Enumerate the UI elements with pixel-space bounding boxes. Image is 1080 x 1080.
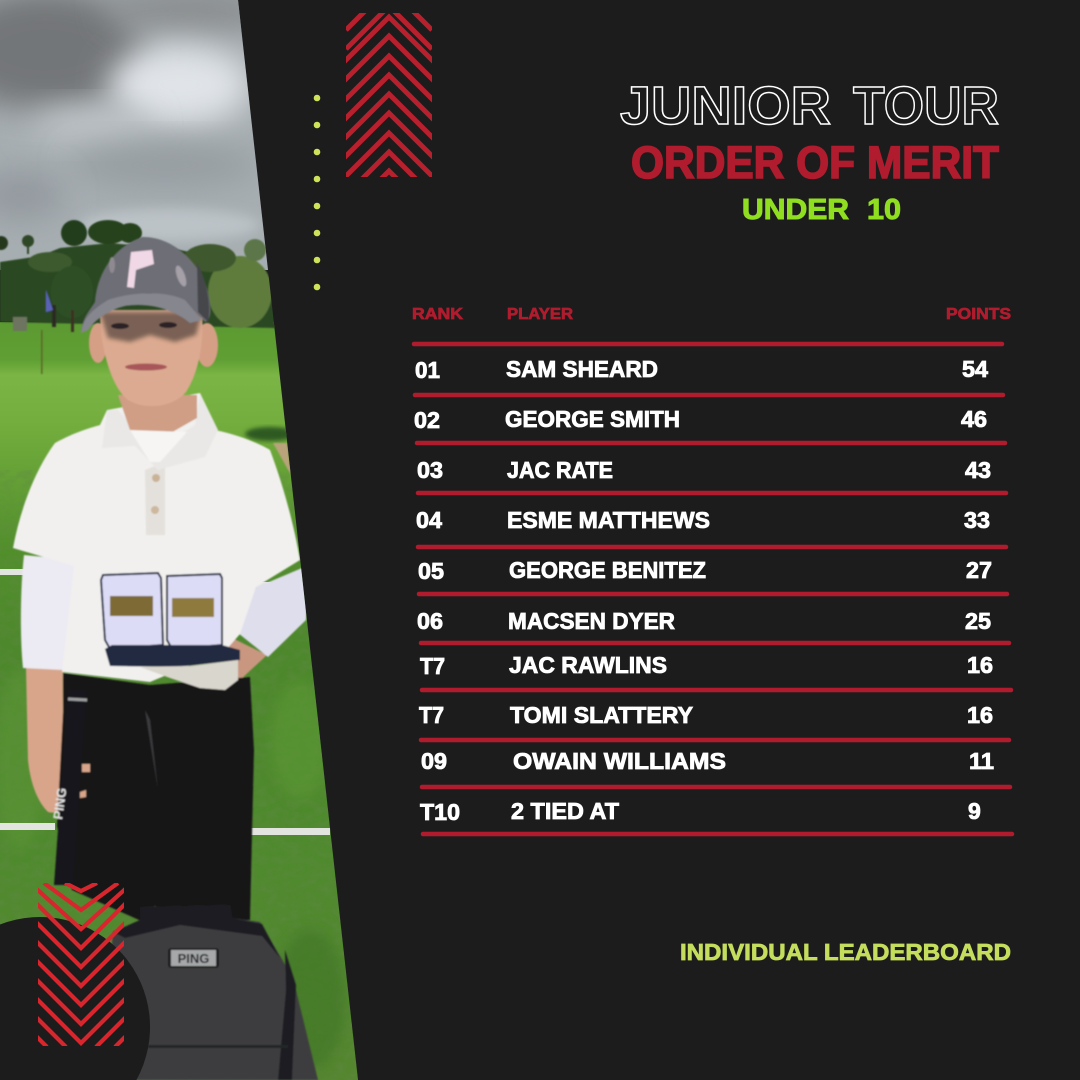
medal boxes	[101, 573, 163, 649]
leaderboard row 04: 04	[416, 507, 442, 533]
putter grip	[53, 830, 72, 886]
leaderboard row 09: 11	[969, 748, 994, 774]
leaderboard row 06	[417, 608, 991, 634]
leaderboard row 01: 01	[415, 357, 440, 383]
leaderboard row T10: 2 TIED AT	[511, 798, 619, 824]
leaderboard row 03: JAC RATE	[507, 457, 613, 483]
subheading: Under 10: UNDER	[742, 194, 849, 226]
bottom chevron pattern	[38, 883, 124, 1046]
golfer: PING	[50, 787, 69, 820]
golfer	[13, 237, 318, 1080]
heading: Order of Merit: ORDER OF MERIT	[631, 137, 999, 188]
leaderboard row 03: 03	[417, 457, 443, 483]
leaderboard row 04	[416, 507, 990, 533]
leaderboard row T7 second: 16	[967, 702, 993, 728]
leaderboard row 05: GEORGE BENITEZ	[509, 557, 706, 583]
dark circle bottom-left	[0, 917, 150, 1080]
leaderboard row 01: SAM SHEARD	[506, 356, 658, 382]
leaderboard row T7 first: 16	[967, 652, 993, 678]
photo: young golfer with medals	[0, 0, 370, 1080]
leaderboard row 02: GEORGE SMITH	[505, 406, 680, 432]
ears	[89, 323, 107, 363]
neck and undershirt	[118, 394, 198, 432]
leaderboard row 03	[417, 457, 991, 483]
leaderboard row T7 second: T7	[419, 702, 444, 728]
fingers on grip	[80, 764, 90, 798]
golfer: PING	[178, 951, 209, 966]
leaderboard row 09: 09	[421, 748, 447, 774]
leaderboard row 06: 25	[965, 608, 991, 634]
title: Junior Tour	[620, 76, 999, 136]
leaderboard row 05: 27	[966, 557, 992, 583]
flag and cart	[46, 290, 53, 312]
leaderboard row 01: 54	[962, 356, 988, 382]
subheading: Under 10: 10	[867, 194, 901, 226]
leaderboard row T10: 9	[968, 798, 981, 824]
leaderboard row T10: T10	[420, 799, 460, 825]
baseball cap	[81, 237, 210, 333]
face	[100, 310, 202, 406]
table header: PLAYER	[507, 306, 573, 323]
rough grass texture	[0, 470, 370, 1080]
golf bag	[111, 918, 318, 1080]
leaderboard row 09	[421, 748, 994, 774]
white polo shirt	[13, 393, 300, 682]
leaderboard row 04: ESME MATTHEWS	[507, 507, 710, 533]
leaderboard row 01	[415, 356, 988, 383]
leaderboard row 05: 05	[418, 558, 444, 584]
trousers	[57, 673, 254, 925]
fairway shading and bunker	[0, 427, 345, 1070]
leaderboard row 06: 06	[417, 608, 443, 634]
leaderboard row T7 second: TOMI SLATTERY	[510, 702, 693, 728]
leaderboard row 09: OWAIN WILLIAMS	[513, 748, 726, 774]
leaderboard row T10	[420, 798, 981, 825]
table header: RANK	[412, 306, 463, 323]
table header: POINTS	[946, 306, 1011, 323]
leaderboard row 02	[414, 406, 987, 433]
golf course grass	[0, 322, 370, 1080]
rope fence	[0, 569, 330, 835]
right arm	[228, 639, 267, 680]
table rules	[414, 344, 1012, 834]
top chevron pattern	[346, 13, 432, 177]
subheading: Under 10	[742, 194, 901, 226]
leaderboard row 03: 43	[965, 457, 991, 483]
leaderboard row T7 first: T7	[420, 653, 445, 679]
leaderboard row 06: MACSEN DYER	[508, 608, 675, 634]
leaderboard row 02: 46	[961, 406, 987, 432]
leaderboard row T7 second	[419, 702, 993, 728]
leaderboard row T7 first	[420, 652, 993, 679]
dotted column	[314, 95, 320, 290]
left under-sleeve	[21, 555, 75, 670]
title: Junior Tour: JUNIOR	[620, 76, 831, 136]
title: Junior Tour: TOUR	[853, 76, 999, 136]
leaderboard row 05	[418, 557, 992, 584]
leaderboard row 04: 33	[964, 507, 990, 533]
footer label: INDIVIDUAL LEADERBOARD	[680, 939, 1011, 965]
right under-sleeve	[238, 568, 306, 657]
glove	[140, 660, 238, 690]
table header	[412, 306, 1011, 323]
cap shadow on face	[100, 312, 202, 342]
sky with clouds	[0, 0, 268, 270]
leaderboard row T7 first: JAC RAWLINS	[509, 652, 667, 678]
left arm and hand	[25, 667, 64, 814]
tree line	[0, 220, 275, 374]
leaderboard row 02: 02	[414, 407, 440, 433]
